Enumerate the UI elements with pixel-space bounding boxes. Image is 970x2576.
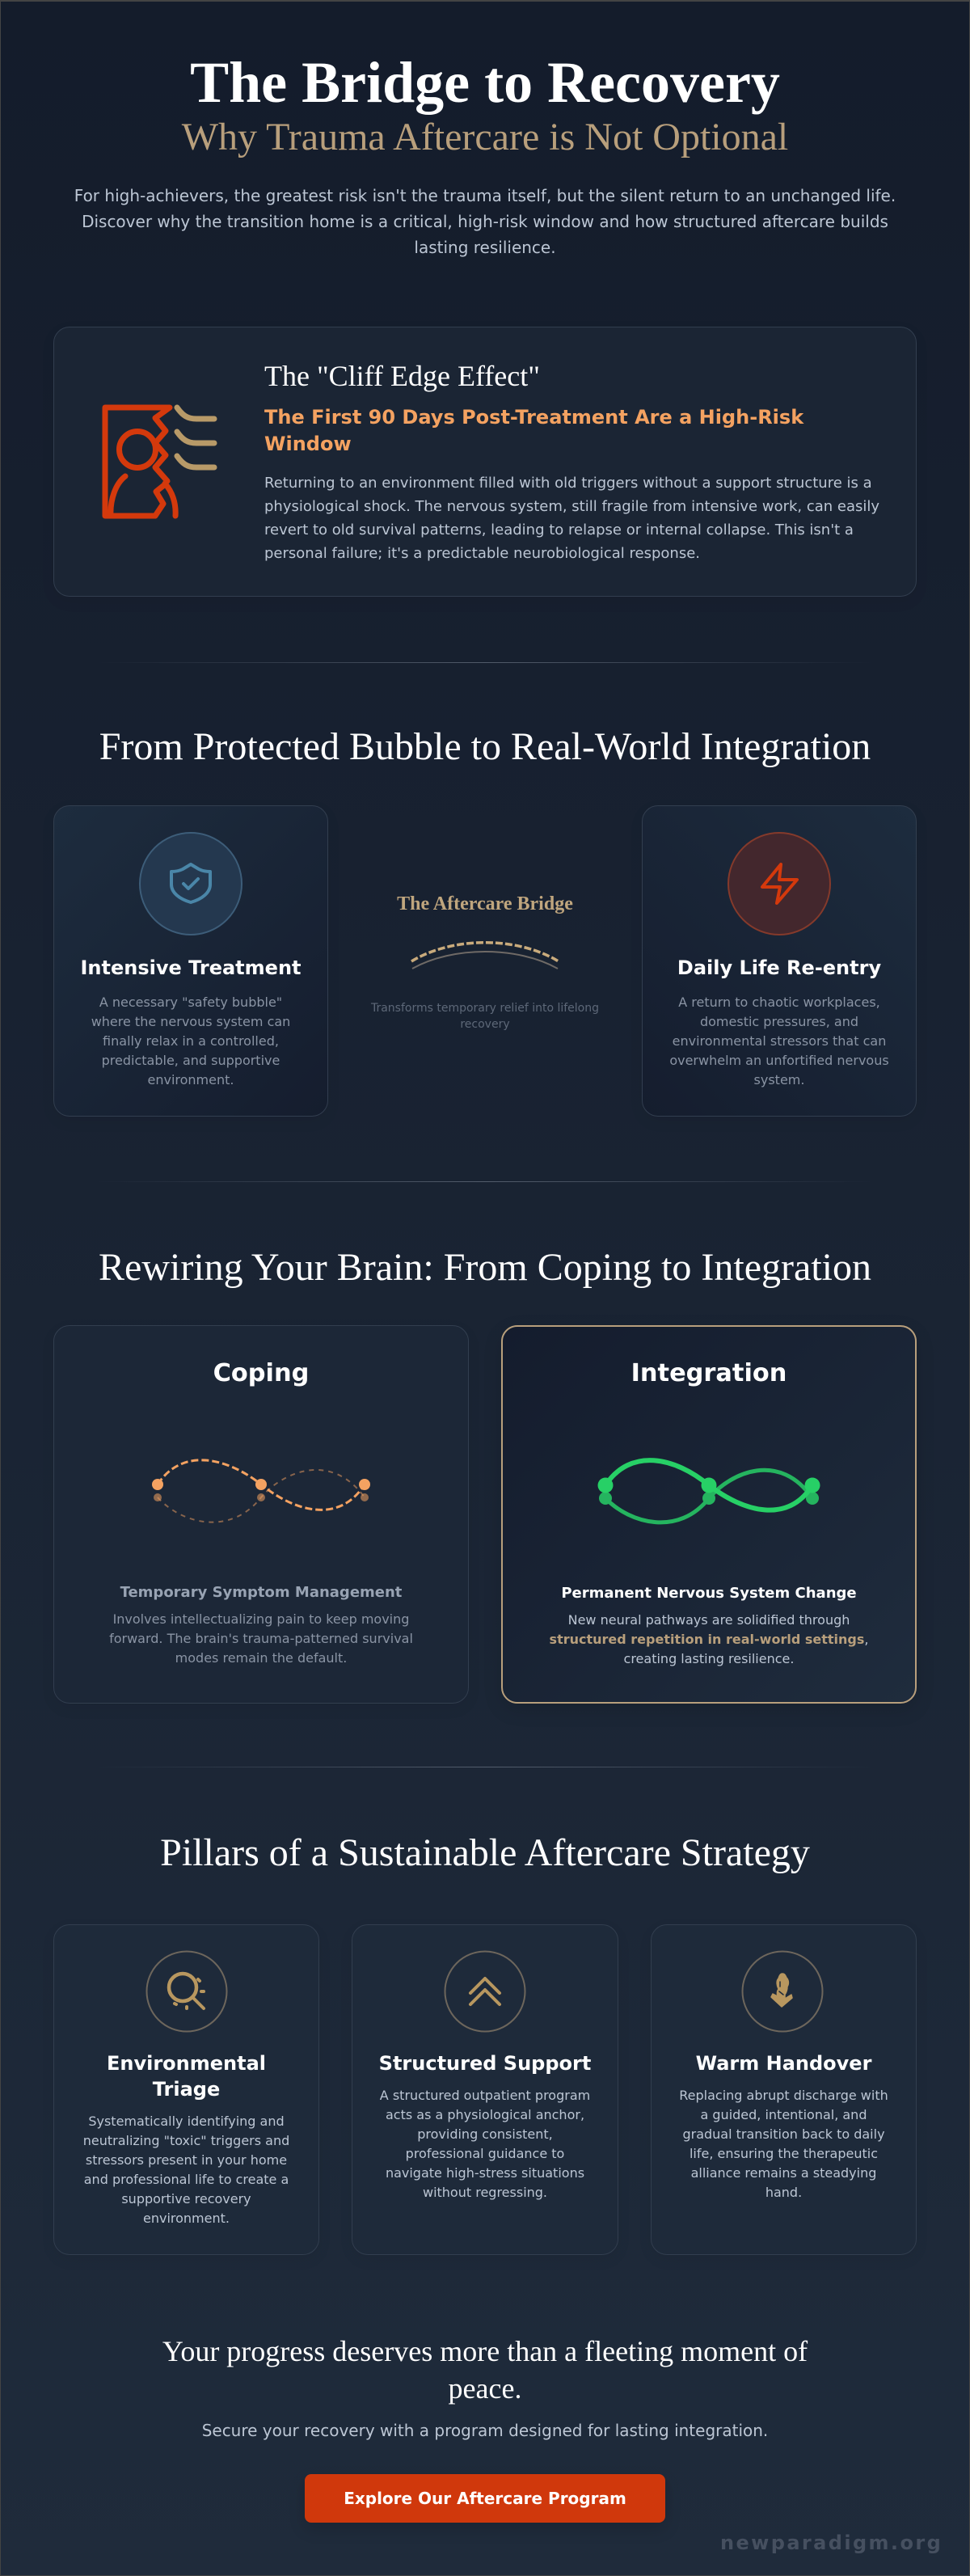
- panel subheading: The First 90 Days Post-Treatment Are a High-Risk: [264, 406, 803, 429]
- card text: Involves intellectualizing pain to keep moving: [113, 1611, 409, 1627]
- panel: cliff edge effect: [53, 327, 917, 597]
- panel subheading: Window: [264, 433, 352, 455]
- card heading: Environmental: [107, 2052, 266, 2075]
- card text: providing consistent,: [417, 2126, 553, 2142]
- card text: A necessary "safety bubble": [99, 995, 282, 1010]
- card text: [380, 2088, 590, 2200]
- card subheading: Permanent Nervous System Change: [561, 1585, 857, 1602]
- heading: rewiring: Rewiring Your Brain: From Coping to Integration: [99, 1246, 871, 1289]
- chart: solid pathways: [598, 1458, 820, 1525]
- card text: acts as a physiological anchor,: [386, 2107, 584, 2122]
- intro text: For high-achievers, the greatest risk isn't the trauma itself, but the silent return to an unchanged life.: [74, 186, 896, 205]
- card text: overwhelm an unfortified nervous: [669, 1053, 889, 1068]
- button: Explore Our Aftercare Program: [344, 2489, 626, 2508]
- card text: environment.: [147, 1072, 234, 1087]
- card text: forward. The brain's trauma-patterned survival: [109, 1631, 413, 1646]
- closing text: Secure your recovery with a program designed for lasting integration.: [202, 2421, 768, 2440]
- panel: structured support: [352, 1924, 618, 2255]
- title: The Bridge to Recovery: [190, 50, 780, 115]
- card text: Replacing abrupt discharge with: [679, 2088, 888, 2103]
- card heading: Structured Support: [379, 2052, 591, 2075]
- card text: a guided, intentional, and: [700, 2107, 867, 2122]
- card text: A return to chaotic workplaces,: [678, 995, 880, 1010]
- card heading: Warm Handover: [696, 2052, 871, 2075]
- card text: and professional life to create a: [84, 2172, 289, 2187]
- card text: system.: [754, 1072, 804, 1087]
- watermark: newparadigm.org: [720, 2532, 943, 2554]
- bridge caption: recovery: [460, 1018, 510, 1031]
- card text: supportive recovery: [121, 2191, 251, 2206]
- closing heading: Your progress deserves more than a fleeting moment of: [162, 2335, 808, 2367]
- closing heading: [162, 2335, 808, 2405]
- card text: New neural pathways are solidified through: [568, 1612, 850, 1628]
- card text: hand.: [765, 2185, 802, 2200]
- card subheading: Temporary Symptom Management: [120, 1584, 402, 1601]
- panel body text: personal failure; it's a predictable neurobiological response.: [264, 545, 700, 562]
- card heading: Integration: [631, 1359, 787, 1387]
- card heading: Coping: [213, 1359, 309, 1387]
- closing heading: peace.: [449, 2372, 521, 2405]
- button: [305, 2474, 665, 2523]
- card text: stressors present in your home: [86, 2152, 287, 2168]
- panel body text: revert to old survival patterns, leading to relapse or internal collapse. This isn't a: [264, 522, 854, 538]
- card text: [679, 2088, 888, 2200]
- card text: neutralizing "toxic" triggers and: [83, 2133, 289, 2148]
- panel: integration: [501, 1325, 917, 1704]
- card text: environmental stressors that can: [673, 1033, 886, 1049]
- panel: intensive treatment: [53, 805, 328, 1117]
- card heading: Intensive Treatment: [81, 956, 301, 979]
- card text: [83, 2114, 289, 2226]
- icon: double chevron: [445, 1950, 525, 2033]
- card text: predictable, and supportive: [102, 1053, 280, 1068]
- card heading: Triage: [153, 2078, 220, 2101]
- panel: warm handover: [651, 1924, 917, 2255]
- card text: creating lasting resilience.: [624, 1651, 794, 1666]
- card text: life, ensuring the therapeutic: [690, 2146, 878, 2161]
- heading: protected bubble: From Protected Bubble to Real-World Integration: [99, 725, 871, 768]
- panel body text: physiological shock. The nervous system, still fragile from intensive work, can easily: [264, 498, 879, 515]
- card text: where the nervous system can: [91, 1014, 290, 1029]
- icon: lightning bolt: [728, 832, 831, 935]
- card text: gradual transition back to daily: [682, 2126, 885, 2142]
- bridge center block: [371, 893, 599, 1031]
- card text: navigate high-stress situations: [386, 2165, 584, 2181]
- panel: coping: [53, 1325, 469, 1704]
- card text: modes remain the default.: [175, 1650, 347, 1666]
- intro text: [74, 186, 896, 257]
- bridge title: The Aftercare Bridge: [397, 893, 573, 914]
- card heading: Daily Life Re-entry: [677, 956, 881, 979]
- card text: alliance remains a steadying: [691, 2165, 876, 2181]
- card text: environment.: [143, 2211, 230, 2226]
- panel: daily life re-entry: [642, 805, 917, 1117]
- chart: dashed pathways: [152, 1459, 370, 1523]
- card text: professional guidance to: [406, 2146, 564, 2161]
- card text: finally relax in a controlled,: [103, 1033, 279, 1049]
- card text: [109, 1611, 413, 1666]
- icon: magnifier: [146, 1950, 228, 2033]
- bridge caption: Transforms temporary relief into lifelong: [371, 1002, 599, 1015]
- intro text: lasting resilience.: [414, 238, 556, 257]
- card text: [550, 1612, 868, 1666]
- icon: shield: [139, 832, 242, 935]
- card text: [91, 995, 290, 1087]
- icon: cracked door with person: [102, 404, 217, 519]
- card text: domestic pressures, and: [700, 1014, 858, 1029]
- card text: [669, 995, 889, 1087]
- subtitle: Why Trauma Aftercare is Not Optional: [182, 116, 788, 158]
- panel body text: [264, 475, 879, 562]
- card text: structured repetition in real-world settings,: [550, 1632, 868, 1647]
- panel body text: Returning to an environment filled with old triggers without a support structure is a: [264, 475, 872, 492]
- panel subheading: [264, 406, 804, 455]
- panel: environmental triage: [53, 1924, 319, 2255]
- card text: Systematically identifying and: [88, 2114, 285, 2129]
- panel heading: The "Cliff Edge Effect": [264, 360, 540, 392]
- intro text: Discover why the transition home is a critical, high-risk window and how structured aftercare builds: [82, 212, 888, 231]
- card heading: [107, 2052, 266, 2101]
- heading: pillars: Pillars of a Sustainable Aftercare Strategy: [160, 1831, 810, 1874]
- bridge caption: [371, 1002, 599, 1031]
- icon: bridge arcs: [411, 941, 559, 969]
- card text: without regressing.: [423, 2185, 547, 2200]
- card text: A structured outpatient program: [380, 2088, 590, 2103]
